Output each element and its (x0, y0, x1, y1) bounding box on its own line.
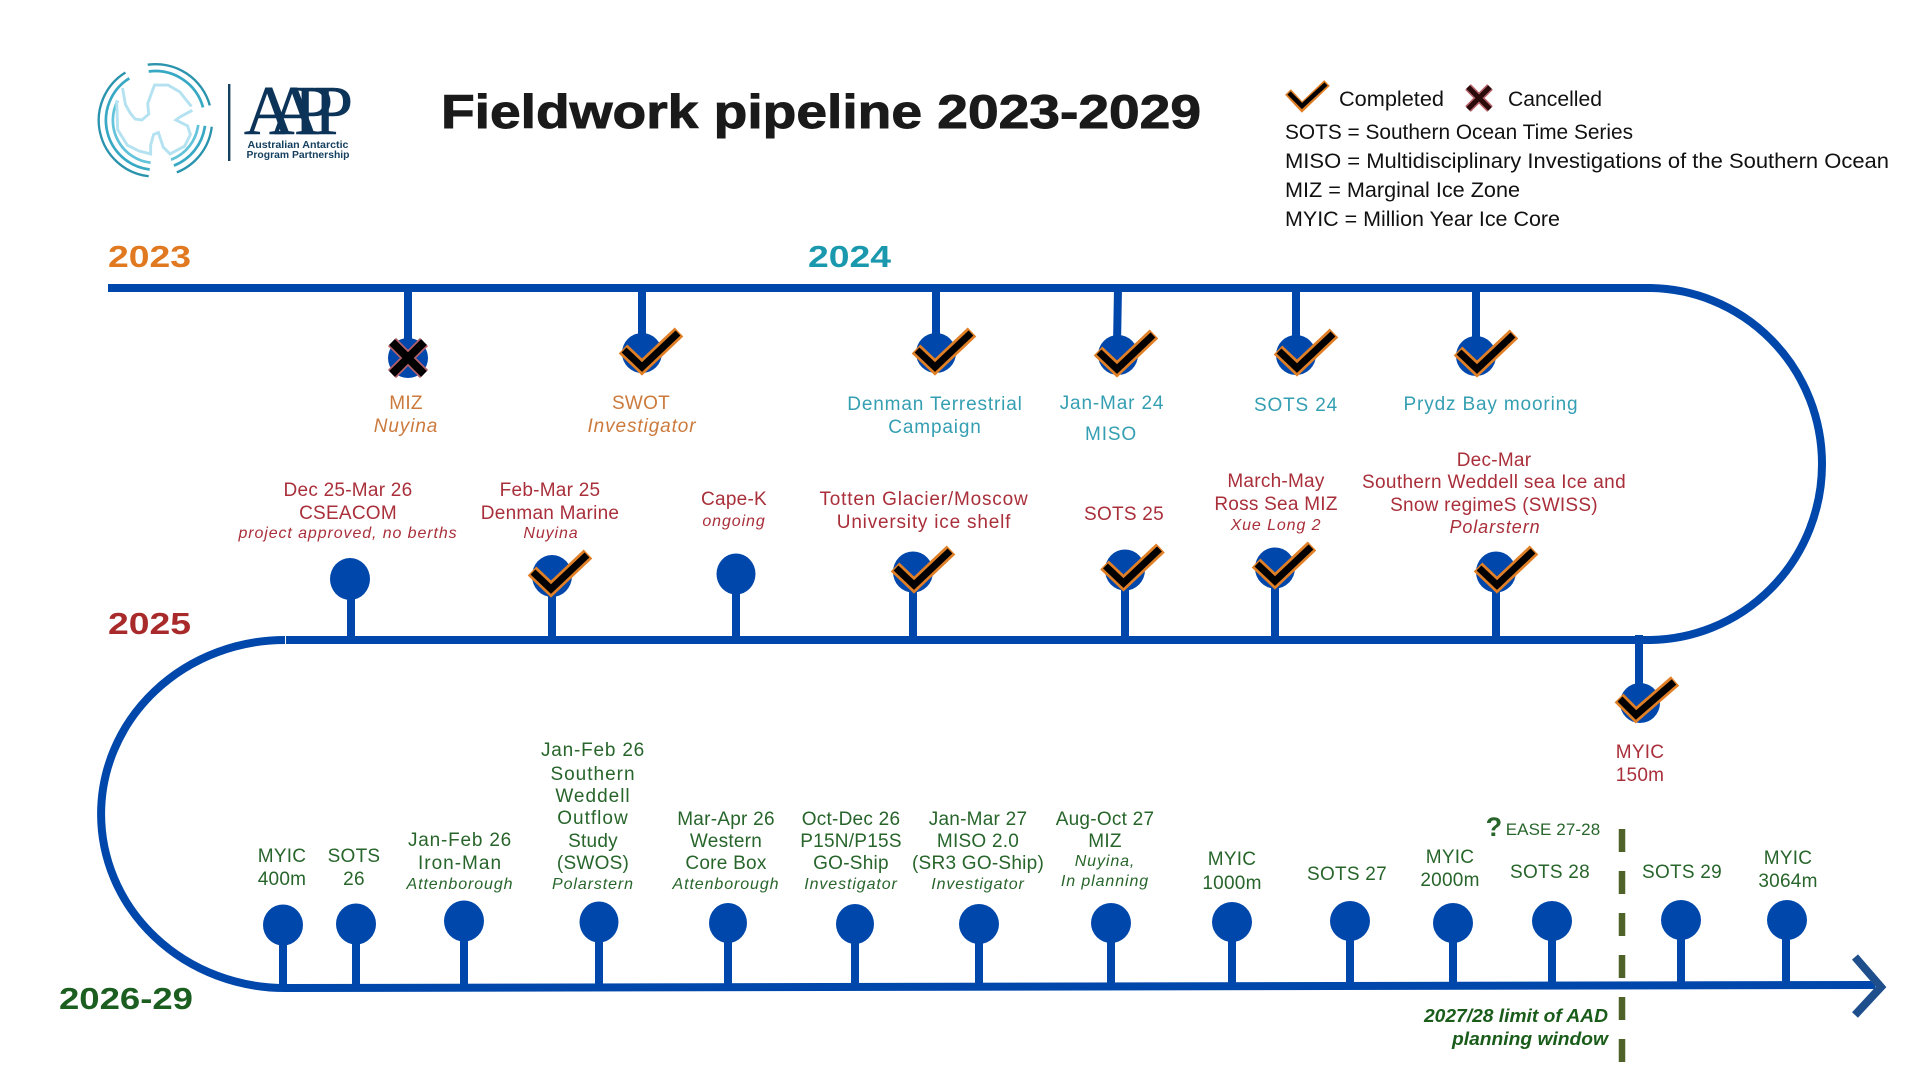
marker (893, 552, 933, 640)
planning window limit line (1619, 829, 1625, 1062)
check (1278, 333, 1334, 368)
marker (1620, 635, 1660, 723)
check (916, 332, 972, 367)
label (912, 809, 1044, 893)
milestone: Western Core Box (672, 809, 779, 987)
label: March-May (1227, 471, 1325, 492)
legend abbreviations: SOTS = Southern Ocean Time Series (1285, 121, 1633, 144)
marker (1433, 903, 1473, 986)
milestone: Ross Sea MIZ (1214, 471, 1338, 640)
label: Jan-Feb 26 (408, 830, 512, 851)
label: Xue Long 2 (1230, 517, 1321, 534)
marker (709, 903, 747, 987)
label: MIZ (1088, 831, 1122, 852)
milestone: SOTS 29 (1642, 862, 1722, 985)
legend icon: cancelled cross (1468, 87, 1490, 109)
milestone: Jan-Mar 24 MISO (1060, 288, 1164, 445)
label: Ross Sea MIZ (1214, 494, 1338, 515)
legend abbreviations: MYIC = Million Year Ice Core (1285, 208, 1560, 231)
logo subtitle: Australian Antarctic (248, 139, 349, 151)
label: Outflow (557, 808, 629, 829)
label: Iron-Man (418, 853, 502, 874)
check (1478, 550, 1534, 585)
marker (1476, 552, 1516, 640)
label: University ice shelf (837, 512, 1011, 533)
marker (336, 904, 376, 987)
label: Attenborough (406, 876, 513, 893)
milestone: MYIC 150m (1616, 635, 1675, 786)
logo subtitle (246, 139, 350, 161)
label: SOTS (328, 846, 380, 867)
label: Campaign (888, 417, 982, 438)
label: Denman Terrestrial (847, 394, 1023, 415)
marker (532, 555, 572, 640)
marker (330, 558, 370, 640)
timeline arrowhead (1855, 957, 1881, 1015)
label: Denman Marine (481, 503, 619, 524)
marker (444, 900, 484, 987)
legend abbreviations: MISO = Multidisciplinary Investigations of the Southern Ocean (1285, 150, 1889, 173)
check (1256, 546, 1312, 581)
milestone: Aug-Oct 27 MIZ (1056, 809, 1154, 987)
milestone: SOTS 24 (1254, 288, 1338, 416)
milestone: SWOT Investigator (587, 288, 697, 437)
marker (622, 288, 662, 373)
marker (1330, 901, 1370, 986)
label: 26 (343, 869, 365, 890)
label: ongoing (702, 513, 766, 530)
label (481, 480, 619, 542)
label (374, 393, 438, 437)
label: Prydz Bay mooring (1404, 394, 1578, 415)
label (406, 830, 513, 893)
label: Study (568, 831, 618, 852)
question mark: ? (1486, 812, 1502, 842)
milestone: SWOS (541, 740, 645, 987)
label: MYIC (1426, 847, 1474, 868)
label: Investigator (804, 876, 898, 893)
check (895, 550, 951, 585)
marker (1212, 902, 1252, 987)
label: Western (690, 831, 762, 852)
label: Totten Glacier/Moscow (820, 489, 1028, 510)
label: (SWOS) (557, 853, 629, 874)
label (328, 846, 380, 890)
check (1458, 334, 1514, 369)
check (1619, 681, 1675, 715)
milestone: P15N/P15S GO-Ship (800, 809, 902, 987)
marker (1105, 550, 1145, 640)
label: SOTS 28 (1510, 862, 1590, 883)
label: P15N/P15S (800, 831, 902, 852)
check (623, 332, 679, 367)
label: SOTS 24 (1254, 395, 1338, 416)
label: Oct-Dec 26 (802, 809, 900, 830)
label: Weddell (555, 786, 631, 807)
check (1098, 334, 1154, 369)
label: 3064m (1758, 871, 1818, 892)
marker (388, 288, 428, 378)
milestone: MYIC 2000m (1420, 847, 1480, 986)
marker (1456, 288, 1496, 376)
label (1758, 848, 1818, 892)
label: Nuyina, (1075, 853, 1135, 870)
year label 2025: 2025 (108, 606, 191, 641)
logo wordmark: AAPP (244, 73, 353, 150)
label: Southern Weddell sea Ice and (1362, 472, 1626, 493)
milestone: CSEACOM (237, 480, 458, 640)
label: Nuyina (523, 525, 579, 542)
milestone: Iron-Man (406, 830, 513, 987)
label (1056, 809, 1154, 890)
timeline path (101, 288, 1875, 988)
label: Nuyina (374, 416, 438, 437)
logo emblem: concentric rings (99, 64, 212, 176)
marker (263, 904, 303, 987)
label: Jan-Mar 27 (929, 809, 1027, 830)
label: Snow regimeS (SWISS) (1390, 495, 1598, 516)
label (1420, 847, 1480, 891)
label: SWOT (612, 393, 670, 414)
label (258, 846, 306, 890)
label: GO-Ship (813, 853, 889, 874)
label (1214, 471, 1338, 534)
label (820, 489, 1028, 533)
milestone: SOTS 25 (1084, 504, 1164, 640)
milestone: MIZ Nuyina (cancelled) (374, 288, 438, 437)
label: Feb-Mar 25 (500, 480, 600, 501)
label: project approved, no berths (237, 525, 458, 542)
label: Cape-K (701, 489, 767, 510)
year label 2023: 2023 (108, 239, 191, 274)
label: MYIC (258, 846, 306, 867)
label (1362, 450, 1626, 537)
milestone: SWISS (1362, 450, 1626, 640)
label: 1000m (1202, 873, 1262, 894)
label: MYIC (1764, 848, 1812, 869)
marker (1255, 548, 1295, 640)
label: CSEACOM (299, 503, 397, 524)
cross (392, 342, 424, 374)
legend label: completed: Completed (1339, 88, 1444, 111)
label: Investigator (931, 876, 1025, 893)
label (587, 393, 697, 437)
label: Mar-Apr 26 (677, 809, 775, 830)
label: Attenborough (672, 876, 779, 893)
milestone: MYIC 400m (258, 846, 306, 987)
legend label: cancelled: Cancelled (1508, 88, 1602, 111)
label: 2000m (1420, 870, 1480, 891)
label: SOTS 25 (1084, 504, 1164, 525)
label: Dec 25-Mar 26 (284, 480, 412, 501)
label: MIZ (389, 393, 423, 414)
logo subtitle: Program Partnership (246, 149, 350, 161)
label (701, 489, 767, 530)
label: Jan-Mar 24 (1060, 393, 1164, 414)
milestone: MYIC 3064m (1758, 848, 1818, 982)
marker (1276, 288, 1316, 375)
label (672, 809, 779, 893)
label (800, 809, 902, 893)
label (1202, 849, 1262, 894)
legend icon: completed check (1288, 83, 1327, 107)
label (1060, 393, 1164, 445)
marker (1767, 900, 1807, 982)
marker (1532, 901, 1572, 986)
check (1104, 548, 1160, 583)
milestone: Denman Terrestrial Campaign (847, 288, 1023, 438)
label: SOTS 27 (1307, 864, 1387, 885)
label: MYIC (1208, 849, 1256, 870)
marker (716, 554, 756, 640)
label (847, 394, 1023, 438)
marker (959, 904, 999, 987)
marker (1091, 903, 1131, 987)
milestone: SOTS 28 (1510, 862, 1590, 986)
milestone: MYIC 1000m (1202, 849, 1262, 987)
label: MYIC (1616, 742, 1664, 763)
legend (1285, 83, 1889, 231)
label: (SR3 GO-Ship) (912, 853, 1044, 874)
label: Polarstern (552, 876, 634, 893)
planning window note (1423, 1006, 1609, 1049)
legend abbreviations: MIZ = Marginal Ice Zone (1285, 179, 1520, 202)
label: EASE 27-28 (1506, 820, 1600, 839)
label (237, 480, 458, 542)
label: MISO (1085, 424, 1137, 445)
label: 400m (258, 869, 306, 890)
year label 2026-29: 2026-29 (59, 981, 193, 1016)
label: Polarstern (1449, 517, 1541, 537)
marker (1661, 900, 1701, 985)
marker (1098, 288, 1138, 375)
year label 2024: 2024 (808, 239, 892, 274)
milestone: MISO 2.0 (912, 809, 1044, 987)
milestone: SOTS 27 (1307, 864, 1387, 986)
legend abbreviations (1285, 121, 1889, 231)
milestone: Denman Marine (481, 480, 619, 640)
milestone: Totten Glacier (820, 489, 1028, 640)
title: Fieldwork pipeline 2023-2029 (441, 85, 1201, 138)
label: Southern (550, 764, 636, 785)
label: Investigator (587, 416, 697, 437)
planning window note: 2027/28 limit of AAD (1423, 1006, 1608, 1026)
label (541, 740, 645, 893)
label: Core Box (685, 853, 767, 874)
milestone: SOTS 26 (328, 846, 380, 987)
label (1616, 742, 1664, 786)
marker (916, 288, 956, 373)
planning window note: planning window (1451, 1029, 1609, 1049)
label: Dec-Mar (1457, 450, 1532, 471)
logo divider (228, 84, 230, 161)
milestone: Cape-K (701, 489, 767, 640)
label: MISO 2.0 (937, 831, 1019, 852)
label: 150m (1616, 765, 1664, 786)
check (532, 554, 588, 589)
marker (580, 902, 618, 987)
milestone: Prydz Bay mooring (1404, 288, 1578, 415)
label: Jan-Feb 26 (541, 740, 645, 761)
milestone: EASE 27-28 (1486, 812, 1600, 842)
label: SOTS 29 (1642, 862, 1722, 883)
label: In planning (1061, 873, 1149, 890)
label: Aug-Oct 27 (1056, 809, 1154, 830)
marker (836, 904, 874, 987)
logo: Australian Antarctic Program Partnership (99, 64, 353, 176)
